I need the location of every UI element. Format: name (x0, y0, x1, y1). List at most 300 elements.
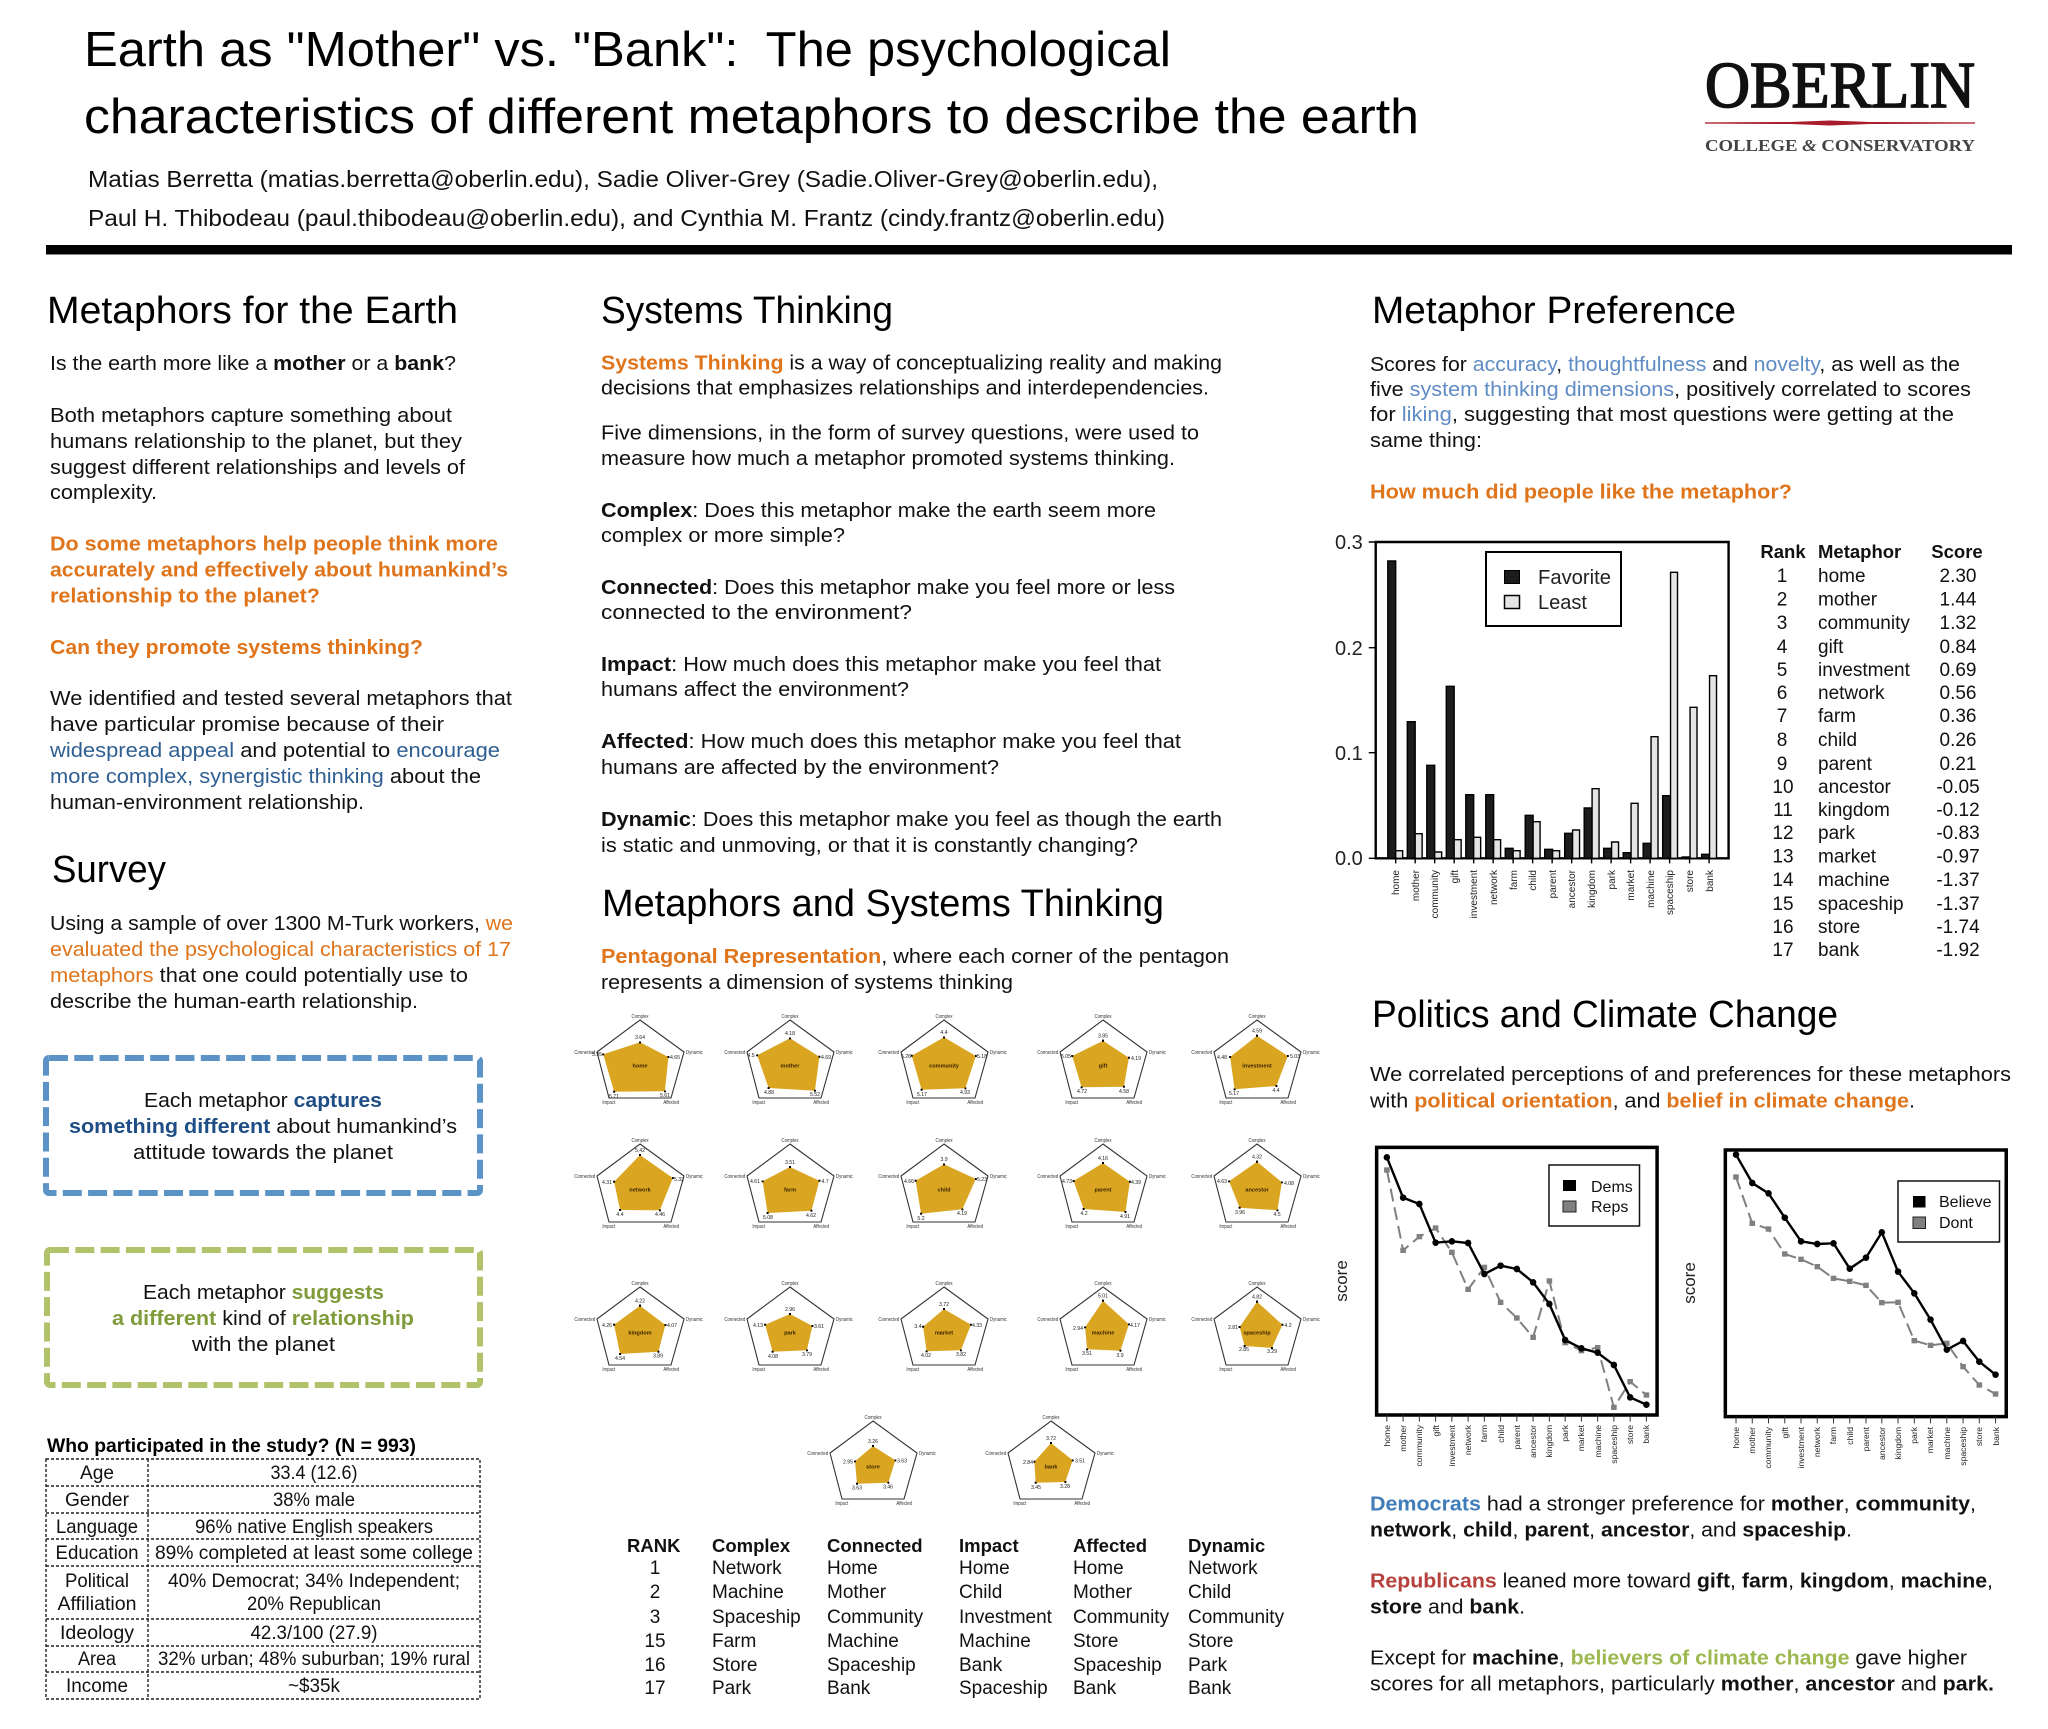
x axis labels: community (1414, 1424, 1424, 1467)
table rows: Area (78, 1648, 116, 1670)
radar: farm: 4.61 (750, 1179, 760, 1185)
table: top and bottom ranks by dimension (627, 1535, 1285, 1699)
radar: gift: 5.05 (1061, 1054, 1071, 1060)
radar: bank: bank (1044, 1464, 1058, 1470)
radar: kingdom: 3.89 (653, 1354, 663, 1360)
heading: Metaphors and Systems Thinking (602, 883, 1164, 925)
radar: kingdom: 4.26 (602, 1323, 612, 1329)
table rows: market (1818, 846, 1877, 868)
radar: home: Complex (631, 1014, 649, 1020)
authors: Matias Berretta (matias.berretta@oberlin.edu), Sadie Oliver-Grey (Sadie.Oliver-Grey@oberlin.edu), (88, 166, 1158, 192)
radar: farm: 4.62 (806, 1213, 816, 1219)
table rows: Home (1073, 1558, 1124, 1579)
x axis labels: child (1528, 870, 1539, 891)
table rows: Spaceship (712, 1607, 801, 1628)
table rows: 5 (1777, 660, 1787, 681)
text block: impact: Impact: How much does this metaphor make you feel that (601, 653, 1161, 676)
radar: gift: Complex (1094, 1014, 1112, 1020)
x axis labels: home (1382, 1425, 1392, 1446)
radar: community: 5.26 (901, 1054, 911, 1060)
x axis labels: network (1463, 1424, 1473, 1455)
text block: correlation: with political orientation , and belief in climate change . (1369, 1090, 1915, 1112)
table rows: park (1818, 823, 1855, 844)
y axis labels (1335, 532, 1363, 870)
radar: machine: 3.51 (1082, 1351, 1092, 1357)
radar: store: Dynamic (919, 1451, 936, 1457)
text block: democrats: network, child, parent, ancestor, and spaceship. (1370, 1518, 1852, 1542)
table rows: Age (80, 1462, 114, 1484)
text block: connected: Connected : Does this metaphor make you feel more or less (601, 576, 1175, 599)
heading: Politics and Climate Change (1372, 994, 1838, 1036)
panel: systems thinking (601, 290, 1222, 857)
radar: home: Affected (663, 1100, 679, 1106)
text block: complex: complex or more simple? (601, 524, 845, 547)
x axis labels: mother (1398, 1425, 1408, 1452)
radar: ancestor: 4.32 (1252, 1154, 1262, 1160)
table rows: 20% Republican (247, 1593, 381, 1615)
radar: investment: 5.03 (1290, 1054, 1300, 1060)
table rows: investment (1818, 660, 1911, 681)
legend (1898, 1181, 2000, 1242)
radar: gift: Affected (1126, 1100, 1142, 1106)
radar: bank: 2.84 (1023, 1460, 1033, 1466)
table rows: Community (827, 1607, 924, 1628)
table rows: -1.37 (1936, 870, 1980, 891)
radar: gift: Dynamic (1149, 1050, 1166, 1056)
table rows: Community (1188, 1607, 1285, 1628)
radar: machine (1037, 1281, 1166, 1373)
header rule (46, 245, 2012, 254)
table rows: 9 (1777, 754, 1787, 775)
table rows: Park (712, 1678, 752, 1699)
table rows: Ideology (60, 1622, 134, 1644)
table rows: Language (56, 1516, 138, 1538)
radar: park: Dynamic (836, 1317, 853, 1323)
panel: metaphors and systems thinking (574, 883, 1320, 1699)
callout: suggests a different relationship (47, 1250, 480, 1385)
table rows: kingdom (1818, 800, 1890, 821)
radar: investment: Dynamic (1303, 1050, 1320, 1056)
table grid (46, 1459, 480, 1699)
text block: connected (601, 576, 1175, 624)
x axis labels: community (1763, 1426, 1773, 1469)
table rows: Child (1188, 1582, 1231, 1603)
bars (1369, 542, 1729, 863)
text block: impact (601, 653, 1161, 701)
radar: store: 3.46 (883, 1484, 893, 1490)
table rows: Gender (65, 1489, 129, 1511)
panel: survey (50, 849, 513, 1013)
radar: market: Impact (906, 1367, 920, 1373)
authors (88, 166, 1165, 231)
radar: machine: machine (1092, 1330, 1114, 1336)
table rows (56, 1462, 473, 1697)
table header: Rank (1760, 541, 1806, 562)
table rows: Political (65, 1570, 129, 1592)
radar: network: Connected (574, 1174, 595, 1180)
table rows: 0.84 (1940, 637, 1977, 658)
x axis labels: investment (1447, 1424, 1457, 1467)
line chart: Dems vs Reps (1332, 1147, 1657, 1467)
radar: home: home (633, 1064, 647, 1070)
x axis labels: market (1925, 1426, 1935, 1453)
authors: Paul H. Thibodeau (paul.thibodeau@oberlin.edu), and Cynthia M. Frantz (cindy.frantz@oberlin.edu) (88, 205, 1165, 231)
radar: market: 3.82 (956, 1352, 966, 1358)
radar: kingdom: Affected (663, 1367, 679, 1373)
table rows: ~$35k (288, 1675, 340, 1697)
x axis labels: spaceship (1609, 1425, 1619, 1464)
radar: bank: 3.51 (1075, 1458, 1085, 1464)
radar: ancestor: 4.5 (1273, 1212, 1281, 1218)
text block: survey description: describe the human-earth relationship. (50, 990, 418, 1013)
table rows: Income (66, 1675, 128, 1697)
table rows: -1.74 (1936, 917, 1980, 938)
logo: Oberlin College & Conservatory (1705, 49, 1975, 155)
radar: kingdom: Complex (631, 1281, 649, 1287)
radar: market: 4.02 (921, 1353, 931, 1359)
x axis labels: mother (1747, 1427, 1757, 1454)
table rows: 11 (1773, 800, 1793, 821)
radar: community (878, 1014, 1007, 1106)
text block: introduction: humans relationship to the planet, but they (50, 430, 463, 453)
table rows: machine (1818, 870, 1890, 891)
radar: investment: investment (1242, 1064, 1272, 1070)
text block: pentagonal representation: Pentagonal Representation , where each corner of the pentagon (601, 945, 1229, 968)
radar: investment: 5.17 (1229, 1091, 1239, 1097)
radar: community: Affected (967, 1100, 983, 1106)
radar: farm: Complex (781, 1138, 799, 1144)
text block: definition: Five dimensions, in the form of survey questions, were used to (601, 422, 1199, 444)
table rows: 3 (650, 1607, 660, 1628)
radar: park: 4.13 (753, 1323, 763, 1329)
x axis labels: park (1607, 869, 1618, 889)
table rows: 42.3/100 (27.9) (250, 1622, 378, 1644)
radar: gift: 3.85 (1098, 1034, 1108, 1040)
table rows: Affiliation (58, 1593, 136, 1615)
radar: spaceship (1191, 1281, 1320, 1373)
radar: gift (1037, 1014, 1166, 1106)
x axis labels: ancestor (1528, 1425, 1538, 1458)
table header: RANK (627, 1535, 681, 1556)
text block: survey description: Using a sample of over 1300 M-Turk workers, we (50, 912, 513, 935)
table rows: ancestor (1818, 777, 1892, 798)
table rows: Machine (959, 1631, 1031, 1652)
radar: network: 4.46 (655, 1212, 665, 1218)
table rows: Education (56, 1542, 138, 1564)
table rows: 0.21 (1940, 754, 1976, 775)
table rows: Mother (1073, 1582, 1133, 1603)
radar: kingdom: Dynamic (686, 1317, 703, 1323)
x axis labels: bank (1705, 869, 1716, 892)
radar: kingdom: 4.22 (635, 1298, 645, 1304)
text block: research questions: accurately and effectively about humankind’s (50, 558, 508, 582)
radar: market: Affected (967, 1367, 983, 1373)
table rows: Spaceship (827, 1655, 916, 1676)
radar: spaceship: Complex (1248, 1281, 1266, 1287)
radar: farm: Connected (724, 1174, 745, 1180)
text block: tested metaphors: widespread appeal and potential to encourage (49, 739, 500, 762)
radar: mother (724, 1014, 853, 1106)
x axis labels: spaceship (1958, 1427, 1968, 1466)
table rows: Home (827, 1558, 878, 1579)
radar: investment: Impact (1219, 1100, 1233, 1106)
radar: parent: 4.16 (1098, 1156, 1108, 1162)
heading: Metaphors for the Earth (47, 290, 458, 332)
radar: machine: 2.94 (1073, 1326, 1083, 1332)
text block: introduction: suggest different relationships and levels of (50, 456, 465, 479)
text block: pentagonal representation (601, 945, 1229, 994)
radar: farm: Affected (813, 1224, 829, 1230)
table rows: 17 (644, 1678, 666, 1699)
x axis labels: ancestor (1567, 869, 1578, 908)
radar: gift: 4.19 (1131, 1056, 1141, 1062)
table rows: network (1818, 683, 1885, 704)
text block: scores (1370, 353, 1971, 452)
table rows: 1.32 (1940, 613, 1976, 634)
radar: park: 2.96 (785, 1307, 795, 1313)
text block: definition: measure how much a metaphor promoted systems thinking. (601, 447, 1175, 470)
table rows: 0.56 (1940, 683, 1976, 704)
heading: Systems Thinking (601, 290, 893, 332)
radar: investment (1191, 1014, 1320, 1106)
table rows: 40% Democrat; 34% Independent; (168, 1570, 460, 1592)
text block: introduction: complexity. (50, 481, 157, 504)
radar: ancestor: Connected (1191, 1174, 1212, 1180)
radar: spaceship: spaceship (1243, 1330, 1271, 1336)
text block: tested metaphors (49, 687, 512, 814)
radar: child (878, 1138, 1007, 1230)
radar: spaceship: Impact (1219, 1367, 1233, 1373)
radar: gift: Connected (1037, 1050, 1058, 1056)
table header: Dynamic (1188, 1535, 1265, 1556)
radar: parent: Impact (1065, 1224, 1079, 1230)
x axis labels: home (1391, 870, 1402, 895)
radar: machine: 3.9 (1116, 1353, 1124, 1359)
table rows: 1 (1777, 566, 1787, 587)
x axis labels: gift (1780, 1426, 1790, 1438)
table rows: mother (1818, 590, 1878, 610)
table rows: 15 (1772, 894, 1794, 915)
title: Earth as "Mother" vs. "Bank": The psychological (84, 23, 1171, 77)
radar: gift: Impact (1065, 1100, 1079, 1106)
callout: suggests a different relationship: a different kind of relationship (112, 1307, 414, 1330)
table rows (644, 1558, 1285, 1699)
radar: child: 3.9 (940, 1157, 948, 1163)
text block: democrats: Democrats had a stronger preference for mother, community , (1370, 1492, 1976, 1516)
radar: store: 3.63 (897, 1458, 907, 1464)
x axis labels: market (1576, 1424, 1586, 1451)
radar: ancestor: 3.96 (1235, 1210, 1245, 1216)
radar: ancestor: Dynamic (1303, 1174, 1320, 1180)
x axis labels: kingdom (1587, 870, 1598, 908)
text block: tested metaphors: more complex, synergistic thinking about the (50, 765, 481, 788)
radar: store: 3.26 (868, 1439, 878, 1445)
legend: Believe (1939, 1194, 1992, 1211)
x axis labels: network (1489, 869, 1500, 905)
radar: network: Impact (602, 1224, 616, 1230)
text block: tested metaphors: have particular promise because of their (50, 713, 444, 736)
y axis labels: 0.3 (1335, 532, 1363, 554)
radar: spaceship: 2.85 (1239, 1347, 1249, 1353)
radar: market: Complex (935, 1281, 953, 1287)
x axis labels: parent (1861, 1426, 1871, 1451)
radar: kingdom: Impact (602, 1367, 616, 1373)
x axis labels: mother (1411, 869, 1422, 901)
radar: ancestor: 4.63 (1217, 1179, 1227, 1185)
text block: scores: five system thinking dimensions , positively correlated to scores (1370, 378, 1971, 401)
x axis labels: store (1625, 1425, 1635, 1444)
table rows: 2 (1777, 590, 1787, 610)
radar: home: 5.95 (592, 1052, 602, 1058)
radar: home: Connected (574, 1050, 595, 1056)
x axis labels: network (1812, 1426, 1822, 1457)
table rows: 4 (1777, 637, 1788, 658)
radar: parent: 4.73 (1062, 1179, 1072, 1185)
radar: market: 3.4 (914, 1324, 922, 1330)
text block: survey description: evaluated the psychological characteristics of 17 (50, 938, 511, 961)
text block: climate believers: Except for machine, believers of climate change gave higher (1370, 1646, 1967, 1670)
callout: captures something different: something different about humankind’s (69, 1115, 457, 1138)
x axis labels: bank (1991, 1426, 2001, 1446)
radar: park: park (784, 1330, 797, 1336)
text block: introduction: Both metaphors capture something about (50, 404, 452, 427)
radar: mother: Connected (724, 1050, 745, 1056)
table rows: home (1818, 566, 1866, 587)
radar: farm: 3.51 (785, 1160, 795, 1166)
radar: home: 5.71 (609, 1094, 619, 1100)
legend (1486, 552, 1621, 626)
logo: Oberlin College & Conservatory: OBERLIN (1705, 49, 1975, 122)
radar: machine: Impact (1065, 1367, 1079, 1373)
radar: parent: Connected (1037, 1174, 1058, 1180)
table rows: 7 (1777, 706, 1787, 727)
text block: research questions: Can they promote systems thinking? (50, 636, 423, 659)
x axis labels: farm (1828, 1427, 1838, 1444)
radar: kingdom: Connected (574, 1317, 595, 1323)
radar: store: 3.63 (852, 1486, 862, 1492)
x axis labels: machine (1942, 1427, 1952, 1459)
text block: dynamic: Dynamic: Does this metaphor make you feel as though the earth (601, 808, 1222, 831)
x axis labels: market (1626, 870, 1637, 901)
radar: community: Dynamic (990, 1050, 1007, 1056)
radar: spaceship: Connected (1191, 1317, 1212, 1323)
legend: Reps (1591, 1199, 1628, 1216)
text block: republicans (1370, 1570, 1993, 1618)
table rows: Farm (712, 1631, 756, 1652)
table heading: Who participated in the study? (N = 993) (47, 1435, 416, 1457)
table rows: 10 (1772, 777, 1794, 798)
text block: research questions: Do some metaphors help people think more (50, 532, 498, 556)
table rows: 89% completed at least some college (155, 1542, 473, 1564)
table: who participated (46, 1435, 480, 1699)
table rows: Mother (827, 1582, 887, 1603)
radar: machine: 4.17 (1130, 1323, 1140, 1329)
radar: bank: Dynamic (1097, 1451, 1114, 1457)
radar: parent: Complex (1094, 1138, 1112, 1144)
table header: Score (1931, 541, 1983, 562)
radar: ancestor: Impact (1219, 1224, 1233, 1230)
radar: market: 4.33 (972, 1323, 982, 1329)
line chart: Believe vs Dont (1680, 1150, 2006, 1469)
x axis labels: park (1560, 1424, 1570, 1442)
radar: spaceship: 4.82 (1252, 1294, 1262, 1300)
table rows: 38% male (273, 1489, 355, 1511)
table rows: Spaceship (1073, 1655, 1162, 1676)
radar: park: 3.79 (802, 1352, 812, 1358)
text block: introduction: Is the earth more like a mother or a bank? (50, 352, 456, 375)
text block: scores: same thing: (1370, 429, 1482, 452)
radar: community: 4.4 (940, 1030, 948, 1036)
radar: network: network (629, 1188, 652, 1194)
radar: mother: 5.52 (810, 1092, 820, 1098)
radar: parent: Dynamic (1149, 1174, 1166, 1180)
table rows: Home (959, 1558, 1010, 1579)
table rows: Bank (1188, 1678, 1232, 1699)
radar: bank: 3.45 (1031, 1485, 1041, 1491)
table rows (1772, 566, 1980, 961)
radar: machine: Complex (1094, 1281, 1112, 1287)
text block: tested metaphors: human-environment relationship. (50, 791, 364, 814)
table rows: Park (1188, 1655, 1228, 1676)
table header: Connected (827, 1535, 923, 1556)
y axis labels: 0.1 (1335, 743, 1363, 765)
table rows: Store (712, 1655, 757, 1676)
radar: parent: parent (1094, 1188, 1112, 1194)
radar: market: 3.72 (939, 1302, 949, 1308)
radar: store (807, 1415, 936, 1507)
panel: metaphors for the earth (47, 290, 512, 814)
radar: farm: Impact (752, 1224, 766, 1230)
radar: store: Complex (864, 1415, 882, 1421)
text block: definition (601, 352, 1222, 470)
x axis labels: community (1430, 870, 1441, 918)
x axis labels: store (1974, 1427, 1984, 1446)
radar: parent: Affected (1126, 1224, 1142, 1230)
legend: Dems (1591, 1179, 1633, 1196)
radar: store: Affected (896, 1501, 912, 1507)
radar: bank: 3.72 (1046, 1436, 1056, 1442)
x axis labels: farm (1479, 1425, 1489, 1442)
radar: child: Affected (967, 1224, 983, 1230)
x axis labels: spaceship (1665, 870, 1676, 915)
text block: connected: connected to the environment? (601, 601, 912, 624)
radar: market (878, 1281, 1007, 1373)
text block: affected: humans are affected by the environment? (601, 756, 999, 779)
radar: investment: 4.59 (1252, 1028, 1262, 1034)
table rows: 16 (1772, 917, 1794, 938)
radar: community: 5.18 (977, 1054, 987, 1060)
table rows: Bank (827, 1678, 871, 1699)
table rows: 2 (650, 1582, 660, 1603)
radar: machine: 5.01 (1098, 1294, 1108, 1300)
title: characteristics of different metaphors to describe the earth (84, 90, 1419, 144)
table rows: community (1818, 613, 1910, 634)
text block: introduction (50, 352, 465, 504)
x axis labels: parent (1512, 1424, 1522, 1449)
table rows: 1.44 (1940, 590, 1977, 610)
text block: dynamic: is static and unmoving, or that it is constantly changing? (601, 834, 1138, 857)
radar: community: community (929, 1064, 960, 1070)
radar: investment: Connected (1191, 1050, 1212, 1056)
radar: child: child (937, 1188, 951, 1194)
x axis labels: home (1731, 1427, 1741, 1448)
table rows: -1.92 (1936, 940, 1980, 961)
radar: farm (724, 1138, 853, 1230)
table rows: Community (1073, 1607, 1170, 1628)
callout: suggests a different relationship: Each metaphor suggests (143, 1281, 384, 1304)
x axis labels: bank (1641, 1424, 1651, 1444)
plot frame and lines (1725, 1150, 2006, 1423)
